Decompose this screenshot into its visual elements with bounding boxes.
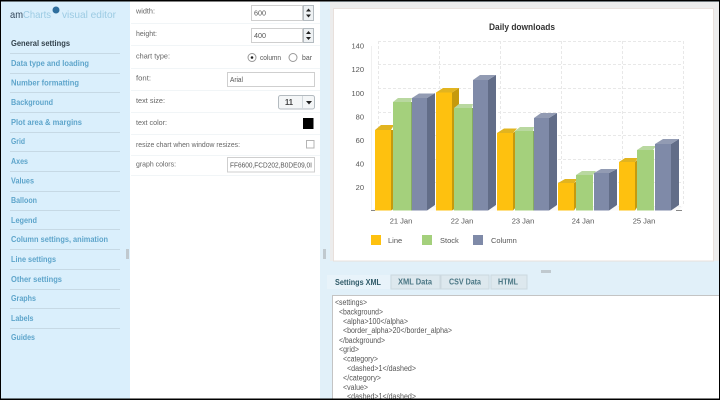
panel: XML code box: <settings> [335, 298, 367, 307]
menu items: Grid [11, 137, 25, 146]
menu items: General settings [11, 39, 71, 48]
font input: Arial [230, 75, 243, 84]
menu items: Axes [11, 157, 28, 166]
panel: chart [334, 8, 714, 261]
menu items: Balloon [11, 196, 37, 205]
text size select: 11 [285, 98, 294, 107]
tabs: Settings XML [335, 278, 381, 287]
panel: sidebar navigation [0, 0, 130, 400]
setting labels: text color: [136, 118, 167, 127]
setting labels [135, 6, 240, 168]
panel: XML code box: </background> [339, 336, 385, 345]
panel: XML code box: </category> [343, 374, 381, 382]
menu items: Labels [11, 314, 34, 323]
tabs: XML Data [398, 278, 433, 286]
text size select [278, 96, 314, 109]
panel: XML code box: <border_alpha>20</border_alpha> [343, 326, 452, 335]
chart title: Daily downloads [489, 22, 555, 33]
setting labels: width: [135, 6, 155, 16]
panel: general settings form [130, 0, 320, 400]
logo: amCharts visual editor [10, 6, 116, 21]
menu items: Background [11, 98, 53, 107]
menu items: Line settings [11, 255, 56, 264]
y axis: 80 [356, 112, 364, 122]
text color swatch [303, 118, 314, 129]
y axis: 120 [351, 65, 364, 74]
x axis labels: 23 Jan [512, 216, 534, 226]
y axis: 40 [356, 160, 364, 168]
columns: 21 Jan [375, 93, 435, 210]
width input [252, 6, 314, 20]
setting labels: chart type: [136, 52, 170, 60]
chart type radio buttons [248, 53, 312, 62]
columns: 25 Jan [619, 139, 679, 210]
panel: XML code box: <alpha>100</alpha> [343, 317, 408, 326]
x axis labels [390, 216, 655, 226]
menu items: Column settings, animation [11, 235, 108, 244]
panel: XML code box [332, 296, 720, 400]
panel: XML code box: <category> [343, 354, 378, 364]
setting labels: height: [136, 29, 157, 38]
y axis: 100 [351, 89, 364, 98]
x axis labels: 25 Jan [633, 216, 655, 226]
menu items: Number formatting [11, 78, 79, 88]
panel: XML code box: <background> [339, 308, 383, 316]
legend [371, 235, 517, 245]
logo: amCharts visual editor: Charts [23, 9, 51, 21]
legend: Column [491, 236, 517, 245]
graph colors input: FF6600,FCD202,B0DE09,0I [230, 160, 312, 170]
graph colors input [228, 158, 314, 172]
columns: 23 Jan [497, 113, 557, 210]
height input [252, 28, 314, 42]
y axis: 60 [356, 136, 364, 145]
logo: amCharts visual editor: visual editor [62, 9, 116, 21]
legend: Stock [440, 236, 459, 245]
menu items: Legend [11, 216, 37, 225]
chart type radio buttons: column [260, 53, 281, 62]
y axis [351, 42, 683, 210]
tabs: CSV Data [449, 278, 481, 286]
height input: 400 [254, 31, 266, 40]
menu items: Guides [11, 333, 35, 342]
legend: Line [388, 236, 402, 245]
menu items: Graphs [11, 294, 36, 303]
columns: 22 Jan [436, 75, 496, 210]
y axis: 140 [351, 42, 364, 50]
x axis labels: 21 Jan [390, 216, 412, 226]
setting labels: text size: [136, 96, 165, 105]
row dividers [131, 24, 320, 176]
panel: XML code box: <grid> [339, 345, 359, 354]
grid [378, 41, 684, 206]
panel: XML code box: <value> [343, 383, 368, 392]
setting labels: resize chart when window resizes: [136, 140, 240, 149]
resize checkbox [306, 140, 314, 148]
menu items: Values [11, 176, 34, 186]
logo: amCharts visual editor: am [10, 9, 23, 21]
y axis: 20 [356, 183, 364, 192]
menu items: Data type and loading [11, 59, 89, 68]
width input: 600 [254, 8, 266, 18]
x axis labels: 22 Jan [451, 216, 473, 226]
chart type radio buttons: bar [302, 53, 312, 62]
menu items: Other settings [11, 275, 63, 284]
sidebar resize handle [126, 249, 129, 259]
font input [228, 72, 314, 86]
menu items: Plot area & margins [11, 118, 83, 127]
panel: XML code box: <dashed>1</dashed> [347, 364, 416, 373]
setting labels: font: [136, 74, 151, 82]
tabs [327, 275, 527, 289]
x axis labels: 24 Jan [572, 216, 594, 226]
menu items [11, 39, 108, 342]
columns: 24 Jan [558, 169, 617, 210]
tabs: HTML [498, 278, 518, 286]
panel: right pane background [320, 0, 720, 400]
setting labels: graph colors: [136, 160, 176, 168]
menu dividers [10, 54, 120, 328]
